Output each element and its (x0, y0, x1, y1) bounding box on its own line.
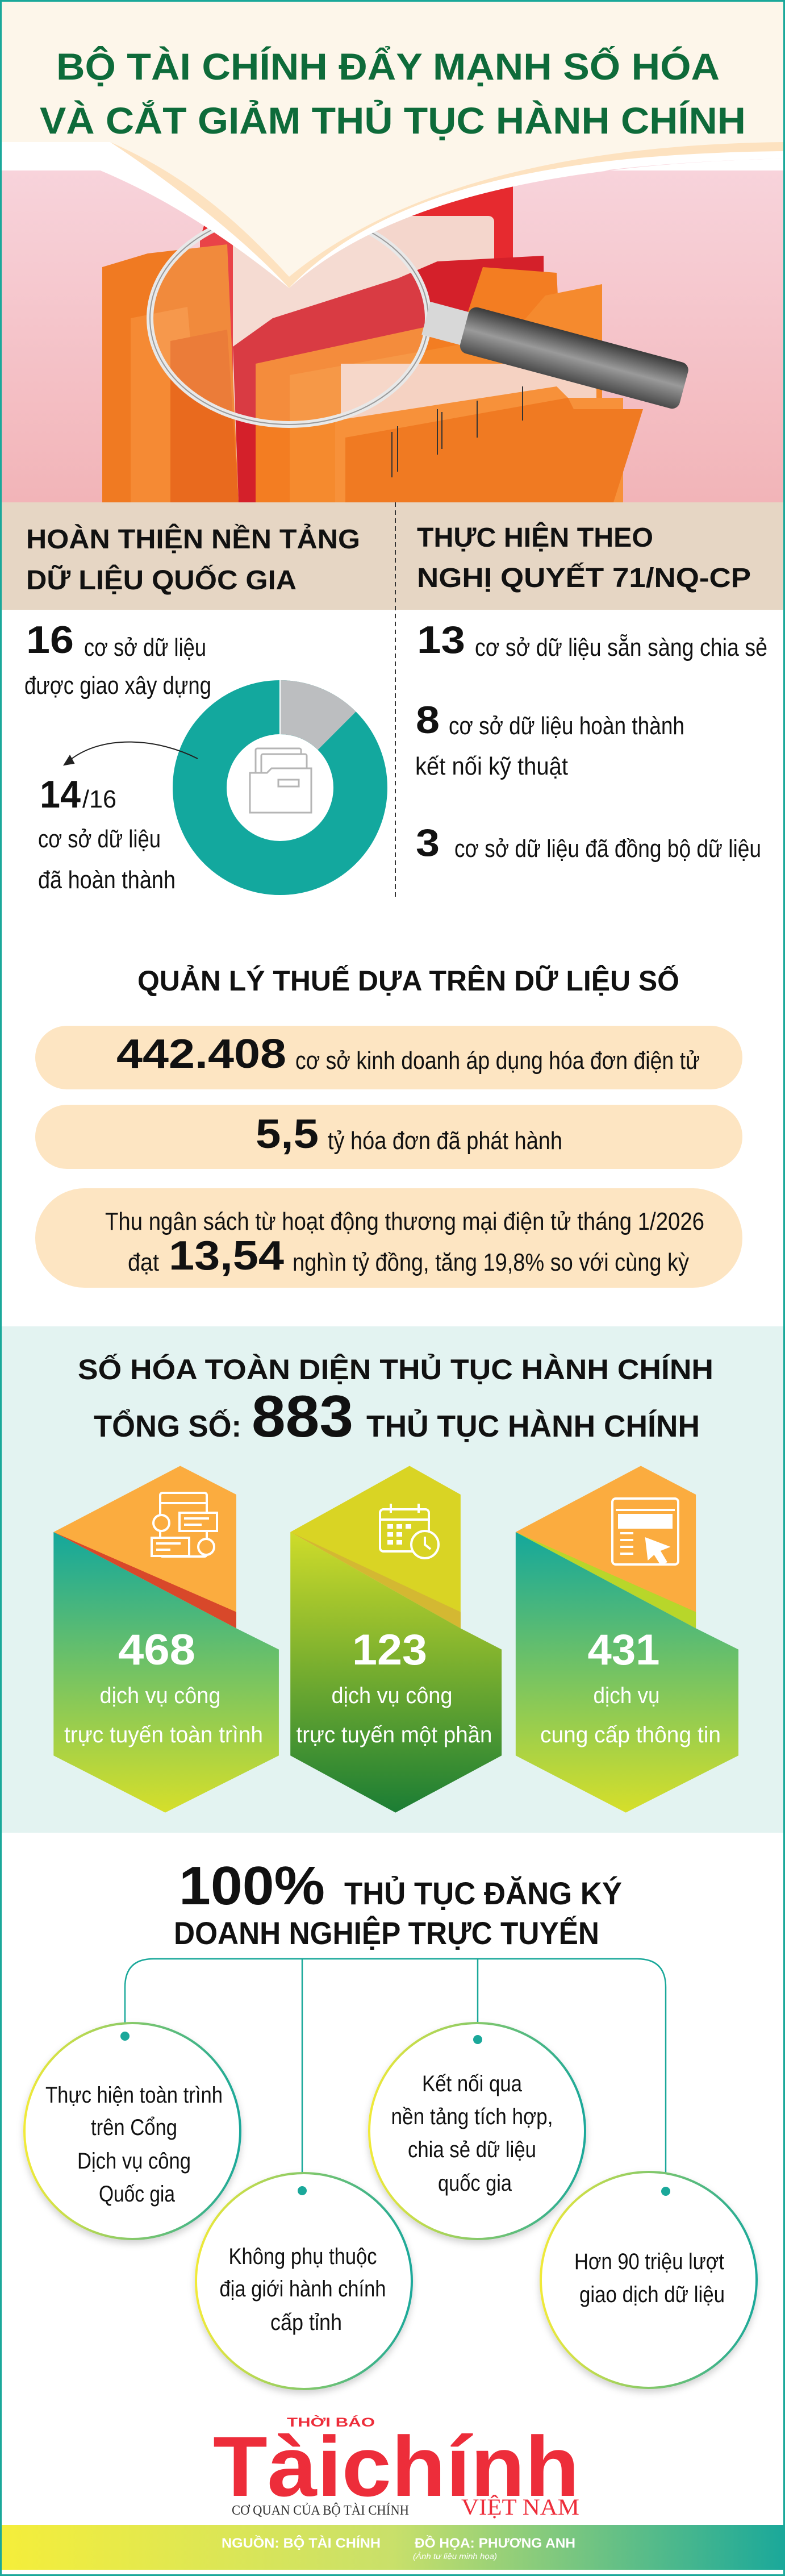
circle 3: Kết nối qua (422, 2071, 523, 2096)
logo: Thời báo Tài chính: VIỆT NAM (461, 2494, 579, 2520)
section headers band (0, 502, 785, 610)
footer credits (0, 2525, 785, 2570)
heading: 100% business registration: THỦ TỤC ĐĂNG KÝ (344, 1875, 622, 1911)
pill: invoices issued: 5,5 (256, 1112, 319, 1157)
14/16 completed: /16 (82, 785, 116, 813)
footer credits: ĐỒ HỌA: PHƯƠNG ANH (415, 2535, 575, 2551)
circle 1 (24, 2023, 240, 2239)
circle 1: trên Cổng (91, 2115, 177, 2140)
pill: e-commerce revenue: 13,54 (169, 1233, 284, 1279)
header wave (0, 0, 785, 288)
right panel stats: 8 (416, 698, 440, 742)
circle 4 (541, 2172, 757, 2388)
heading: hoàn thiện nền tảng (26, 523, 360, 596)
14/16 completed: đã hoàn thành (38, 866, 176, 894)
pill: e-commerce revenue: đạt (128, 1249, 159, 1276)
hex 2 text: 123: dịch vụ công (332, 1683, 452, 1708)
circle 4: Hơn 90 triệu lượt (574, 2249, 724, 2274)
circle 1: Thực hiện toàn trình (45, 2083, 223, 2108)
hex 3 text: 431: cung cấp thông tin (540, 1722, 721, 1747)
circle 2 (196, 2173, 412, 2389)
left panel: 16 databases: 16 (26, 618, 74, 661)
title (40, 45, 746, 142)
hexagon shapes (53, 1466, 738, 1813)
right panel stats: 3 (416, 821, 440, 864)
circle 3: chia sẻ dữ liệu (408, 2137, 536, 2162)
logo: Thời báo Tài chính: THỜI BÁO (287, 2415, 375, 2429)
hex 1 text: 468: 468 (118, 1626, 195, 1674)
heading: số hóa toàn diện: TỔNG SỐ: (94, 1409, 241, 1443)
pill: e-commerce revenue: nghìn tỷ đồng, tăng 19,8% so với cùng kỳ (293, 1249, 689, 1276)
14/16 completed: 14 (40, 773, 81, 816)
hex 1 text: 468 (64, 1626, 263, 1747)
pill: e-invoices businesses: 442.408 (116, 1031, 286, 1077)
right panel stats: 13 (417, 618, 465, 661)
right panel stats: kết nối kỹ thuật (415, 752, 568, 780)
hex 3 text: 431: dịch vụ (593, 1683, 660, 1708)
footer credits: (Ảnh tư liệu minh họa) (413, 2551, 497, 2561)
circle 1: Quốc gia (99, 2182, 176, 2207)
heading: hoàn thiện nền tảng: HOÀN THIỆN NỀN TẢNG (26, 523, 360, 555)
14/16 completed: cơ sở dữ liệu (38, 825, 161, 853)
logo: Thời báo Tài chính: Tàichính (213, 2419, 579, 2514)
header illustration: folders with magnifier (102, 181, 690, 502)
hex 2 text: 123: trực tuyến một phần (297, 1722, 492, 1747)
circle 3 (369, 2023, 585, 2239)
circle 3: nền tảng tích hợp, (391, 2104, 553, 2129)
hex 2 text: 123: 123 (352, 1626, 427, 1674)
heading: số hóa toàn diện (78, 1353, 713, 1450)
logo: Thời báo Tài chính: CƠ QUAN CỦA BỘ TÀI CHÍNH (232, 2503, 409, 2518)
donut chart (200, 680, 360, 868)
icon: calendar clock (380, 1504, 439, 1558)
pill: e-commerce revenue: Thu ngân sách từ hoạt động thương mại điện tử tháng 1/2026 (105, 1208, 704, 1235)
pill: e-invoices businesses: cơ sở kinh doanh áp dụng hóa đơn điện tử (295, 1047, 700, 1075)
pill: e-invoices businesses (35, 1026, 742, 1089)
circle 2: cấp tỉnh (270, 2310, 342, 2335)
left panel: 16 databases: cơ sở dữ liệu (84, 634, 206, 661)
icon: folder (250, 748, 311, 813)
heading: số hóa toàn diện: SỐ HÓA TOÀN DIỆN THỦ TỤC HÀNH CHÍNH (78, 1353, 713, 1385)
right panel stats (415, 618, 767, 864)
right panel stats: cơ sở dữ liệu hoàn thành (449, 712, 684, 740)
left panel: 16 databases (24, 618, 211, 700)
pill: invoices issued (35, 1105, 742, 1169)
footer credits: NGUỒN: BỘ TÀI CHÍNH (222, 2535, 381, 2551)
hex 1 text: 468: dịch vụ công (100, 1683, 220, 1708)
left panel: 16 databases: được giao xây dựng (24, 672, 211, 700)
section: digitalization background (0, 1326, 785, 1833)
heading: hoàn thiện nền tảng: DỮ LIỆU QUỐC GIA (26, 564, 297, 596)
heading: tax management: QUẢN LÝ THUẾ DỰA TRÊN DỮ LIỆU SỐ (137, 964, 679, 997)
hex 3 text: 431 (540, 1626, 721, 1747)
icon: online forms (152, 1493, 217, 1557)
hex 2 text: 123 (297, 1626, 492, 1747)
heading: thực hiện theo nghị quyết (417, 522, 751, 593)
heading: 100% business registration (174, 1855, 622, 1951)
header background (0, 0, 785, 502)
arrow (64, 742, 198, 765)
circle 2: địa giới hành chính (219, 2277, 386, 2302)
pill: invoices issued: tỷ hóa đơn đã phát hành (328, 1127, 562, 1155)
circle 2: Không phụ thuộc (228, 2244, 377, 2269)
hex 3 text: 431: 431 (587, 1626, 660, 1674)
14/16 completed (38, 773, 176, 894)
heading: thực hiện theo nghị quyết: NGHỊ QUYẾT 71/NQ-CP (417, 563, 751, 593)
circle 1: Dịch vụ công (77, 2149, 191, 2174)
icon: web click (612, 1499, 678, 1564)
heading: 100% business registration: 100% (179, 1855, 325, 1916)
pill: e-commerce revenue (35, 1188, 742, 1288)
title: BỘ TÀI CHÍNH ĐẨY MẠNH SỐ HÓA (56, 45, 720, 88)
heading: thực hiện theo nghị quyết: THỰC HIỆN THEO (417, 522, 653, 553)
heading: 100% business registration: DOANH NGHIỆP TRỰC TUYẾN (174, 1915, 599, 1951)
title: VÀ CẮT GIẢM THỦ TỤC HÀNH CHÍNH (40, 99, 746, 142)
heading: số hóa toàn diện: 883 (252, 1384, 353, 1450)
hex 1 text: 468: trực tuyến toàn trình (64, 1722, 263, 1747)
circle 3: quốc gia (438, 2171, 512, 2196)
heading: số hóa toàn diện: THỦ TỤC HÀNH CHÍNH (366, 1409, 700, 1443)
connector lines (125, 1959, 666, 2191)
circle 4: giao dịch dữ liệu (579, 2282, 725, 2307)
